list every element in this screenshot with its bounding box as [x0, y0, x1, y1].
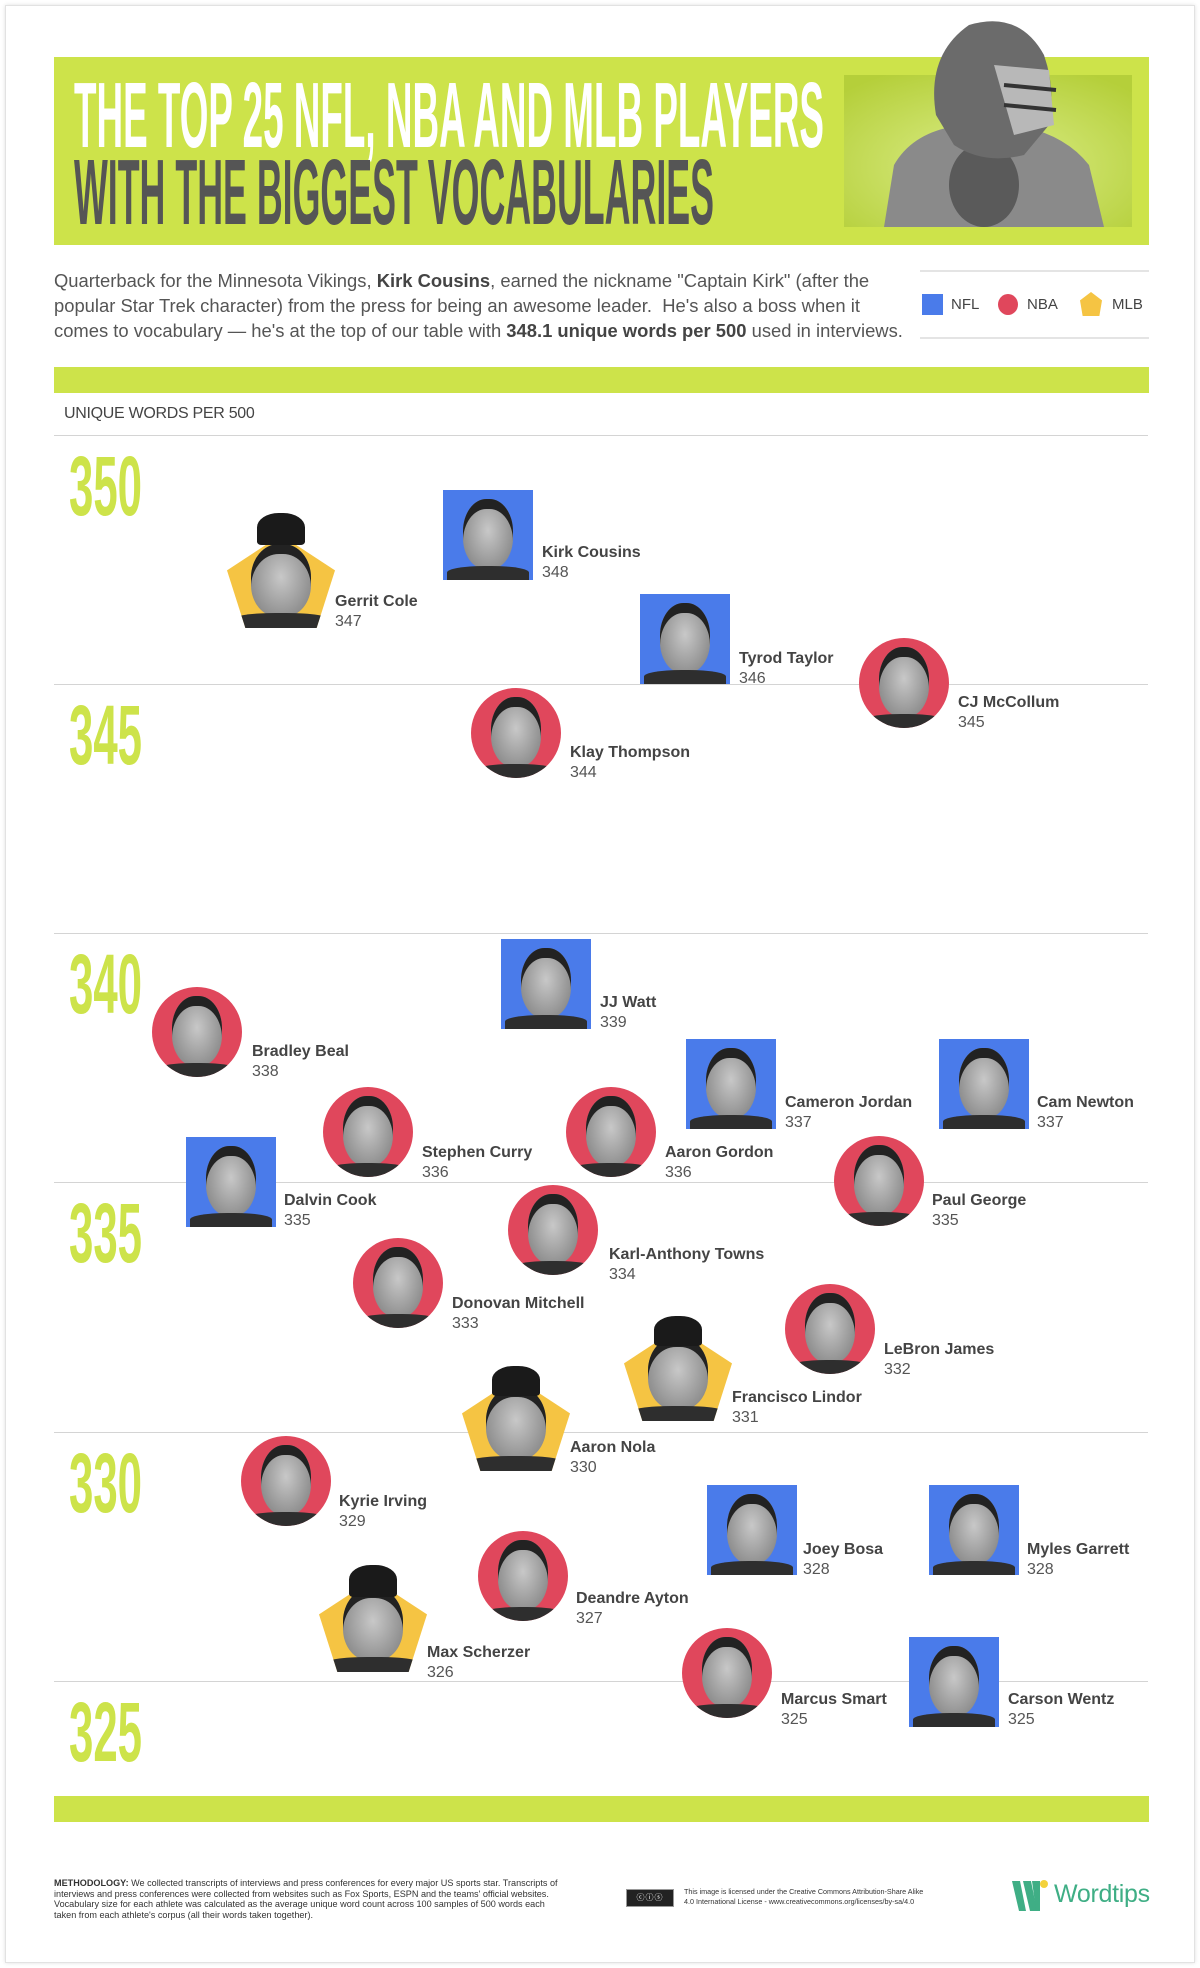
player: Aaron Nola: Aaron Nola: [570, 1439, 655, 1456]
player: Cam Newton: [939, 1039, 1134, 1131]
player: Kyrie Irving: Kyrie Irving: [339, 1493, 427, 1510]
axis title: UNIQUE WORDS PER 500: [64, 405, 254, 422]
player: Francisco Lindor: Francisco Lindor: [732, 1389, 862, 1406]
title banner: [54, 57, 1149, 245]
intro text: Quarterback for the Minnesota Vikings, Kirk Cousins, earned the nickname "Captain Kirk" (after the: [54, 270, 869, 291]
player: Aaron Gordon: [566, 1087, 773, 1181]
player: Kirk Cousins: Kirk Cousins: [542, 544, 641, 561]
player: Carson Wentz: [909, 1637, 1114, 1728]
player: Klay Thompson: 344: [570, 764, 597, 781]
legend: MLB: [1080, 292, 1143, 316]
player: CJ McCollum: [859, 638, 1059, 731]
player: Klay Thompson: [471, 688, 690, 781]
icon: cc badge: ⓒⓘⓢ: [636, 1893, 664, 1902]
player: Karl-Anthony Towns: [508, 1185, 764, 1283]
player: Francisco Lindor: [624, 1316, 862, 1426]
license: 4.0 International License - www.creativecommons.org/licenses/by-sa/4.0: [684, 1896, 914, 1906]
player: Paul George: Paul George: [932, 1192, 1026, 1209]
player: Stephen Curry: 336: [422, 1164, 449, 1181]
player: Donovan Mitchell: Donovan Mitchell: [452, 1295, 584, 1312]
player: Karl-Anthony Towns: Karl-Anthony Towns: [609, 1246, 764, 1263]
player: Dalvin Cook: 335: [284, 1212, 311, 1229]
player: Gerrit Cole: [227, 513, 418, 630]
player: Deandre Ayton: 327: [576, 1610, 603, 1627]
legend: [920, 270, 1149, 339]
methodology: Vocabulary size for each athlete was calculated as the average unique word count across 100 samples of 500 words each: [54, 1899, 545, 1909]
player: Aaron Nola: 330: [570, 1459, 597, 1476]
license: [626, 1887, 923, 1907]
player: Carson Wentz: 325: [1008, 1711, 1035, 1728]
player: Myles Garrett: [929, 1485, 1130, 1578]
player: Paul George: 335: [932, 1212, 959, 1229]
player: Paul George: [834, 1136, 1026, 1229]
player: Max Scherzer: 326: [427, 1664, 454, 1681]
player: Bradley Beal: Bradley Beal: [252, 1043, 349, 1060]
player: Gerrit Cole: Gerrit Cole: [335, 593, 418, 610]
player: CJ McCollum: CJ McCollum: [958, 694, 1059, 711]
methodology: METHODOLOGY: We collected transcripts of interviews and press conferences for every major US sports star. Transcripts of: [54, 1878, 558, 1888]
player: Marcus Smart: 325: [781, 1711, 808, 1728]
player: Aaron Nola: [462, 1366, 656, 1476]
player: Karl-Anthony Towns: 334: [609, 1266, 636, 1283]
player: Max Scherzer: Max Scherzer: [427, 1644, 530, 1661]
title: [74, 63, 824, 244]
player: Bradley Beal: [152, 987, 349, 1080]
icon: cc badge: [626, 1889, 674, 1907]
player: Tyrod Taylor: 346: [739, 670, 766, 687]
player: JJ Watt: [501, 939, 656, 1031]
player: Cameron Jordan: Cameron Jordan: [785, 1094, 912, 1111]
methodology: taken from each athlete's corpus (all their words taken together).: [54, 1910, 313, 1920]
player: Dalvin Cook: Dalvin Cook: [284, 1192, 376, 1209]
methodology: [54, 1878, 558, 1920]
legend: NFL: [922, 294, 979, 315]
player: Max Scherzer: [319, 1565, 530, 1681]
player: Gerrit Cole: 347: [335, 613, 362, 630]
license: This image is licensed under the Creative Commons Attribution-Share Alike: [684, 1887, 923, 1896]
player: Cameron Jordan: 337: [785, 1114, 812, 1131]
player: Joey Bosa: 328: [803, 1561, 830, 1578]
intro text: popular Star Trek character) from the press for being an awesome leader. He's also a boss when it: [54, 295, 860, 316]
player: Francisco Lindor: 331: [732, 1409, 759, 1426]
green bar bottom: [54, 1796, 1149, 1822]
player: Marcus Smart: Marcus Smart: [781, 1691, 887, 1708]
player: CJ McCollum: 345: [958, 714, 985, 731]
player: Bradley Beal: 338: [252, 1063, 279, 1080]
axis numbers: [69, 440, 142, 1770]
methodology: interviews and press conferences were collected from websites such as Fox Sports, ESPN and the teams' official websites.: [54, 1889, 549, 1899]
player: Donovan Mitchell: 333: [452, 1315, 479, 1332]
player: Stephen Curry: [323, 1087, 532, 1181]
logo: Wordtips: Wordtips: [1054, 1880, 1150, 1908]
player: Cam Newton: 337: [1037, 1114, 1064, 1131]
player: Cameron Jordan: [686, 1039, 912, 1131]
player: Kyrie Irving: 329: [339, 1513, 366, 1530]
player: Dalvin Cook: [186, 1137, 376, 1229]
player: Aaron Gordon: 336: [665, 1164, 692, 1181]
legend: MLB: MLB: [1112, 296, 1143, 313]
player: Myles Garrett: Myles Garrett: [1027, 1541, 1129, 1558]
player: Donovan Mitchell: [353, 1238, 584, 1332]
player: Kirk Cousins: [443, 490, 641, 581]
player: Kirk Cousins: 348: [542, 564, 569, 581]
intro text: comes to vocabulary — he's at the top of our table with 348.1 unique words per 500 used in interviews.: [54, 320, 903, 341]
player: Myles Garrett: 328: [1027, 1561, 1054, 1578]
player: Deandre Ayton: [478, 1531, 689, 1627]
player: Stephen Curry: Stephen Curry: [422, 1144, 532, 1161]
player: Joey Bosa: Joey Bosa: [803, 1541, 883, 1558]
player: Carson Wentz: Carson Wentz: [1008, 1691, 1114, 1708]
player: Klay Thompson: Klay Thompson: [570, 744, 690, 761]
player: JJ Watt: JJ Watt: [600, 994, 656, 1011]
player: LeBron James: LeBron James: [884, 1341, 994, 1358]
legend: NBA: [998, 294, 1058, 315]
intro text: [54, 270, 903, 341]
player: Tyrod Taylor: Tyrod Taylor: [739, 650, 834, 667]
player: Marcus Smart: [682, 1628, 887, 1728]
photo: quarterback: [844, 21, 1132, 227]
logo: Wordtips: [1012, 1880, 1150, 1911]
player: LeBron James: [785, 1284, 994, 1378]
player: Kyrie Irving: [241, 1436, 427, 1530]
player: LeBron James: 332: [884, 1361, 911, 1378]
legend: NFL: NFL: [951, 296, 979, 313]
player: Cam Newton: Cam Newton: [1037, 1094, 1134, 1111]
player: Deandre Ayton: Deandre Ayton: [576, 1590, 689, 1607]
player: Joey Bosa: [707, 1485, 884, 1578]
green bar top: [54, 367, 1149, 393]
player: JJ Watt: 339: [600, 1014, 627, 1031]
legend: NBA: NBA: [1027, 296, 1058, 313]
player: Aaron Gordon: Aaron Gordon: [665, 1144, 773, 1161]
player: Tyrod Taylor: [640, 594, 834, 687]
